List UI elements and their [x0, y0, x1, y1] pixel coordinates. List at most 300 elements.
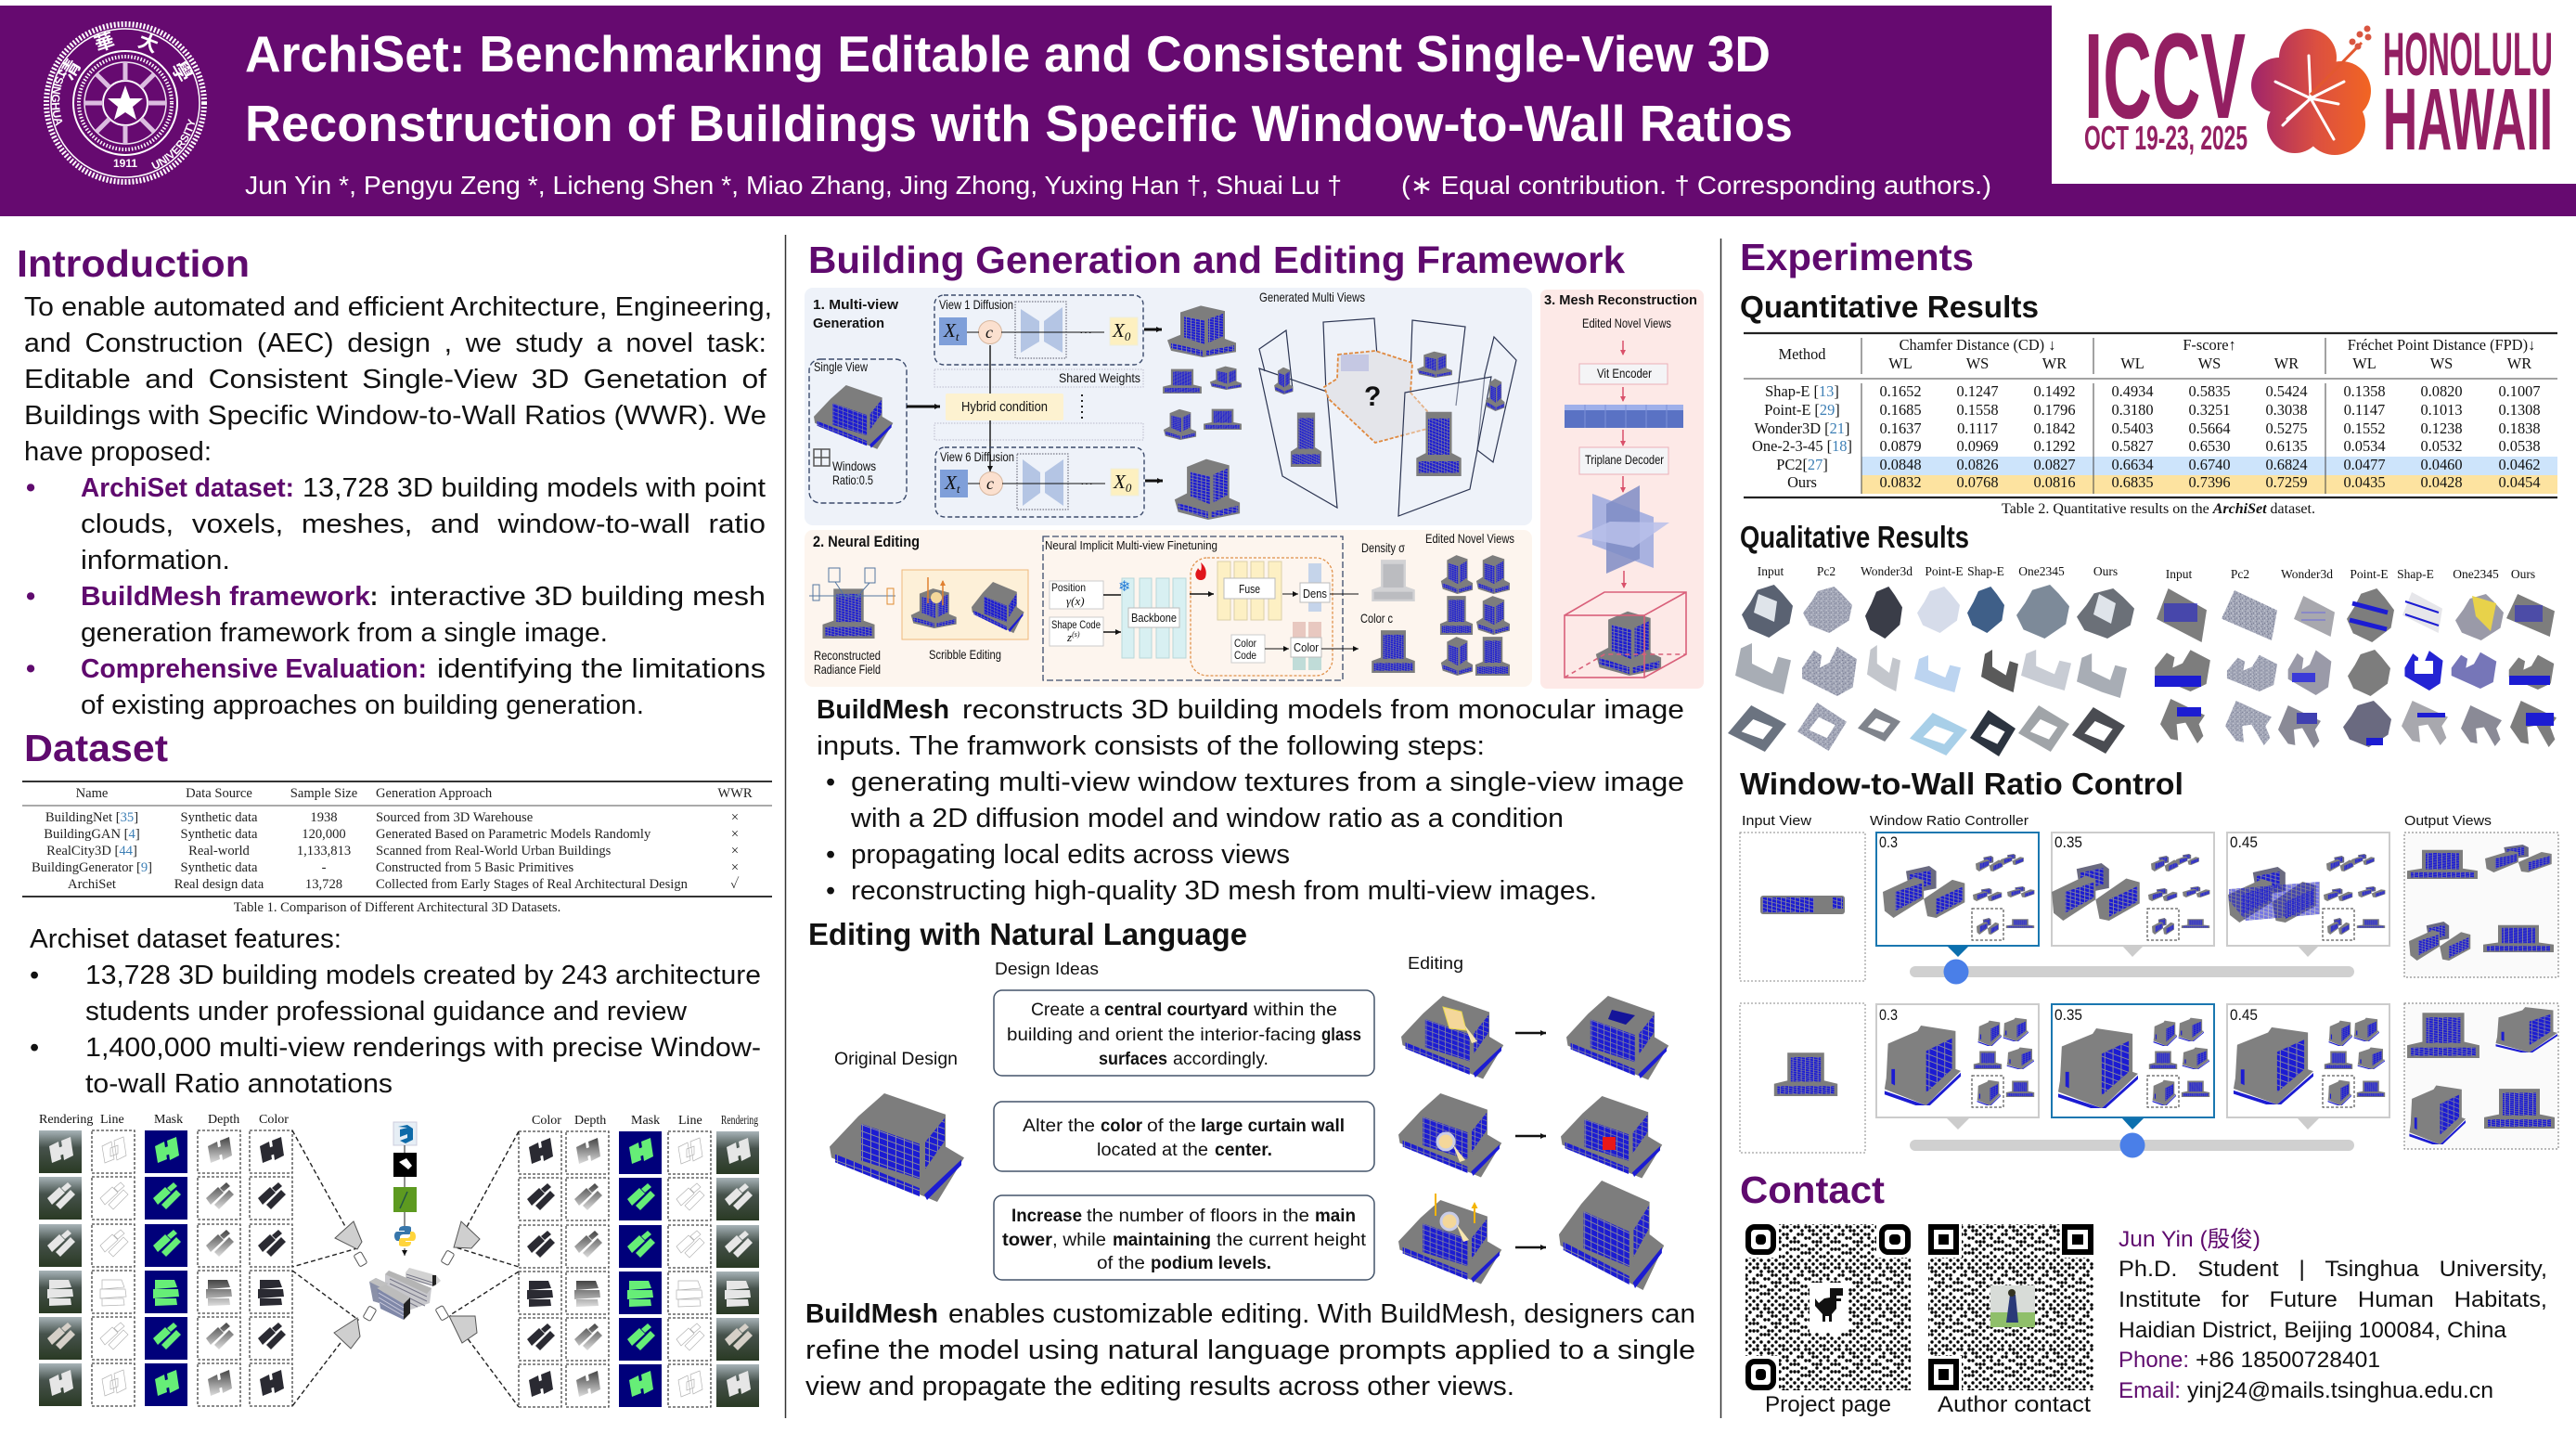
- table 2: quantitative results: 0.6824: [2265, 456, 2308, 473]
- table 1: dataset comparison: Sample Size: [290, 786, 357, 801]
- table 2: quantitative results: F-score↑: [2183, 336, 2236, 354]
- neural implicit finetuning: Shape Code: [1051, 618, 1101, 631]
- method labels: Shap-E: [1967, 564, 2004, 578]
- table 2: quantitative results: Fréchet Point Distance (FPD)↓: [2348, 336, 2535, 354]
- table 1: dataset comparison: 120,000: [302, 827, 346, 842]
- panel: neural editing: 2. Neural Editing: [813, 533, 920, 550]
- design idea 2: Alter the: [1023, 1117, 1095, 1136]
- radiance field: Reconstructed: [814, 648, 881, 663]
- design idea 3: main: [1315, 1207, 1356, 1226]
- heading: Dataset: Dataset: [24, 727, 168, 769]
- table 1: dataset comparison: Real design data: [174, 877, 264, 892]
- panel: introduction text: Editable and Consistent Single-View 3D Genetation of: [24, 365, 767, 394]
- panel: introduction text: •: [26, 654, 35, 684]
- paragraph: BuildMesh editing: refine the model using natural language prompts applied to a single: [805, 1336, 1695, 1365]
- table 2: quantitative results: 0.1637: [1879, 420, 1922, 437]
- column labels: right: Mask: [631, 1114, 660, 1128]
- window ratio control figure: Output Views: [2404, 813, 2492, 829]
- column labels: right: Line: [678, 1114, 702, 1128]
- design idea 1: building and orient the interior-facing: [1007, 1026, 1316, 1045]
- table 2: quantitative results: 0.0532: [2420, 437, 2463, 455]
- row 1: ratio panels: [1876, 833, 2389, 984]
- input views: [1740, 833, 1865, 1153]
- table 2: quantitative results: 0.5424: [2265, 382, 2308, 400]
- panel: introduction text: •: [26, 473, 35, 503]
- authors: [245, 171, 1991, 200]
- view 1 diffusion: c: [985, 323, 993, 342]
- table 1: dataset comparison: Data Source: [186, 786, 252, 801]
- dataset features text: [30, 924, 761, 1099]
- table 1: dataset comparison: BuildingGAN [4]: [44, 827, 140, 842]
- table 1: dataset comparison: BuildingGenerator [9]: [32, 860, 152, 875]
- method labels: Wonder3d: [2281, 567, 2333, 581]
- table 2: quantitative results: 0.0820: [2420, 382, 2463, 400]
- icon: Tsinghua University seal: 清華大學: [59, 32, 193, 82]
- table 2: quantitative results: 0.1013: [2420, 401, 2463, 419]
- view 1 diffusion: X: [1113, 319, 1125, 342]
- natural language editing figure: Original Design: [834, 1050, 958, 1069]
- radiance field: Radiance Field: [814, 662, 881, 677]
- contact details: Institute for Future Human Habitats,: [2119, 1287, 2547, 1312]
- heading: Contact: Contact: [1740, 1168, 1885, 1211]
- table 1: dataset comparison: Synthetic data: [180, 860, 258, 875]
- table 2: quantitative results: 0.7259: [2265, 473, 2308, 491]
- table 2: quantitative results: 0.1007: [2498, 382, 2541, 400]
- design idea 1: Create a: [1031, 1001, 1100, 1020]
- panel: introduction text: of existing approaches on building generation.: [81, 691, 644, 720]
- neural implicit finetuning: Color: [1234, 637, 1256, 650]
- table 1: dataset comparison: ×: [731, 810, 739, 825]
- view 6 diffusion: 0: [1126, 481, 1132, 495]
- table 2: quantitative results: 0.1838: [2498, 420, 2541, 437]
- heading: Introduction: Introduction: [17, 242, 250, 285]
- table 2: quantitative results: 0.1117: [1957, 420, 1998, 437]
- view 1 diffusion: X: [944, 319, 956, 342]
- design idea 3: Increase: [1011, 1207, 1082, 1226]
- generated multi views: [1259, 290, 1516, 516]
- icon: Tsinghua University seal: TSINGHUA: [52, 72, 67, 126]
- ICCV logo: OCT 19-23, 2025: [2084, 119, 2248, 157]
- hybrid condition: [946, 345, 1063, 471]
- panel: introduction text: •: [26, 582, 35, 612]
- neural implicit finetuning: Position: [1051, 581, 1086, 594]
- scribble editing: Scribble Editing: [929, 647, 1001, 662]
- dataset features text: 1,400,000 multi-view renderings with precise Window-: [85, 1033, 761, 1063]
- dataset features text: Archiset dataset features:: [30, 924, 341, 954]
- table 2: quantitative results: 0.1358: [2343, 382, 2386, 400]
- panel: introduction text: :: [370, 582, 378, 612]
- method labels: Ours: [2511, 567, 2535, 581]
- table 2: quantitative results: 0.5835: [2188, 382, 2231, 400]
- generated multi views: ?: [1364, 381, 1381, 412]
- icon: Tsinghua University seal: 1911: [113, 157, 137, 170]
- paragraph: BuildMesh reconstruction: •: [826, 876, 835, 906]
- ICCV logo: ICCV: [2084, 7, 2246, 144]
- table 2: quantitative results: 0.5403: [2111, 420, 2154, 437]
- design idea 2: color: [1101, 1117, 1143, 1136]
- table 2: quantitative results: 0.0969: [1956, 437, 1999, 455]
- paragraph: BuildMesh reconstruction: propagating local edits across views: [851, 840, 1290, 870]
- paragraph: BuildMesh editing: view and propagate the editing results across other views.: [805, 1372, 1514, 1401]
- neural implicit finetuning: (s): [1072, 630, 1080, 639]
- neural implicit finetuning: ❄: [1118, 579, 1130, 595]
- table 2: quantitative results: Table 2. Quantitative results on the ArchiSet dataset.: [2002, 501, 2315, 517]
- panel: multi-view generation: Generation: [813, 316, 884, 331]
- authors: (∗ Equal contribution. † Corresponding authors.): [1401, 171, 1991, 200]
- panel: introduction text: information.: [81, 546, 230, 575]
- view 6 diffusion: c: [986, 474, 994, 493]
- paragraph: BuildMesh editing: BuildMesh: [805, 1299, 938, 1329]
- table 1: dataset comparison: Real-world: [188, 844, 251, 859]
- slider: [1910, 966, 2354, 977]
- design idea 1: [994, 990, 1374, 1076]
- table 2: quantitative results: Shap-E [13]: [1765, 382, 1839, 400]
- table 2: quantitative results: WR: [2507, 355, 2531, 372]
- design idea 1: accordingly.: [1173, 1050, 1269, 1069]
- contact details: Jun Yin (殷俊): [2119, 1227, 2260, 1252]
- design idea 3: the number of floors in the: [1087, 1207, 1309, 1226]
- neural implicit finetuning: z: [1067, 630, 1072, 644]
- single view input: [809, 359, 907, 503]
- shared weights: [934, 369, 1143, 440]
- view 1 diffusion: [934, 295, 1236, 365]
- contact details: yinj24@mails.tsinghua.edu.cn: [2187, 1378, 2493, 1403]
- row 2: ratio panels: 0.3: [1879, 1006, 1898, 1024]
- table 2: quantitative results: 0.5664: [2188, 420, 2231, 437]
- panel: introduction text: 13,728 3D building models with point: [303, 473, 766, 503]
- table 2: quantitative results: 0.6835: [2111, 473, 2154, 491]
- panel: neural editing: [805, 530, 1532, 687]
- design idea 1: surfaces: [1099, 1050, 1167, 1069]
- table 2: quantitative results: WR: [2042, 355, 2067, 372]
- panel: introduction text: Comprehensive Evaluation:: [81, 654, 427, 684]
- table 2: quantitative results: 0.6135: [2265, 437, 2308, 455]
- heading: framework: Building Generation and Editing Framework: [808, 239, 1625, 281]
- table 2: quantitative results: 0.0816: [2033, 473, 2076, 491]
- row 2: ratio panels: 0.35: [2054, 1006, 2082, 1024]
- table 2: quantitative results: [1744, 333, 2557, 517]
- table 2: quantitative results: 0.3038: [2265, 401, 2308, 419]
- design idea 3: of the: [1097, 1254, 1145, 1273]
- table 2: quantitative results: 0.4934: [2111, 382, 2154, 400]
- method labels: One2345: [2453, 567, 2499, 581]
- outputs: Color c: [1360, 611, 1393, 626]
- generated multi views: Generated Multi Views: [1259, 290, 1365, 304]
- design idea 3: maintaining: [1113, 1231, 1211, 1250]
- design idea 3: [994, 1195, 1374, 1280]
- table 1: dataset comparison: RealCity3D [44]: [46, 844, 137, 859]
- table 2: quantitative results: 0.1558: [1956, 401, 1999, 419]
- icon: Tsinghua University seal: [44, 21, 207, 185]
- column labels: right: Depth: [574, 1114, 606, 1128]
- hybrid condition: Hybrid condition: [961, 399, 1048, 415]
- table 2: quantitative results: 0.1247: [1956, 382, 1999, 400]
- heading: Window-to-Wall Ratio Control: Window-to-Wall Ratio Control: [1740, 767, 2183, 801]
- icon: dinosaur: [1815, 1288, 1843, 1322]
- natural language editing figure: [830, 954, 1668, 1290]
- table 2: quantitative results: 0.1842: [2033, 420, 2076, 437]
- output mesh cube: [1565, 592, 1686, 678]
- row 1: ratio panels: 0.35: [2054, 833, 2082, 851]
- table 2: quantitative results: 0.1652: [1879, 382, 1922, 400]
- paragraph: BuildMesh reconstruction: [817, 695, 1684, 906]
- design idea 2: of the: [1147, 1117, 1196, 1136]
- natural language editing figure: Editing: [1408, 954, 1463, 973]
- paragraph: BuildMesh reconstruction: reconstructing high-quality 3D mesh from multi-view images.: [851, 876, 1597, 906]
- panel: multi-view generation: [805, 288, 1532, 525]
- table 2: quantitative results: 0.0538: [2498, 437, 2541, 455]
- paragraph: BuildMesh reconstruction: generating multi-view window textures from a single-view image: [851, 768, 1684, 797]
- header banner: [0, 6, 2576, 216]
- neural implicit finetuning: Dens: [1303, 587, 1327, 600]
- icon: Tsinghua University seal: UNIVERSITY: [151, 119, 195, 169]
- neural implicit finetuning: Color: [1294, 640, 1320, 654]
- column labels: left: Rendering: [39, 1113, 93, 1127]
- table 1: dataset comparison: 13,728: [305, 877, 342, 892]
- blue-window results: [2155, 588, 2557, 748]
- contact details: Phone:: [2119, 1348, 2189, 1373]
- contact details: Email:: [2119, 1378, 2181, 1403]
- method labels: Ours: [2093, 564, 2118, 578]
- paragraph: BuildMesh reconstruction: reconstructs 3D building models from monocular image: [962, 695, 1684, 725]
- neural implicit finetuning: Fuse: [1239, 582, 1260, 596]
- table 2: quantitative results: Ours: [1787, 473, 1817, 491]
- table 1: dataset comparison: Scanned from Real-World Urban Buildings: [376, 844, 612, 859]
- table 2: quantitative results: 0.0832: [1879, 473, 1922, 491]
- table 2: quantitative results: WR: [2274, 355, 2299, 372]
- table 1: dataset comparison: Synthetic data: [180, 827, 258, 842]
- table 2: quantitative results: Wonder3D [21]: [1755, 420, 1849, 437]
- heading: Quantitative Results: Quantitative Results: [1740, 290, 2039, 324]
- table 2: quantitative results: 0.1685: [1879, 401, 1922, 419]
- table 2: quantitative results: 0.0477: [2343, 456, 2386, 473]
- design idea 3: the current height: [1217, 1231, 1367, 1250]
- QR code: author contact: Author contact: [1938, 1392, 2091, 1417]
- panel: introduction text: identifying the limitations: [437, 654, 766, 684]
- table 2: quantitative results: 0.1238: [2420, 420, 2463, 437]
- slider: [1910, 1140, 2354, 1151]
- dataset features text: •: [30, 961, 39, 990]
- neural implicit finetuning: γ(x): [1066, 594, 1085, 608]
- outputs: Edited Novel Views: [1425, 531, 1514, 546]
- photo-textured results: [1728, 585, 2134, 756]
- editing examples: [1398, 996, 1668, 1290]
- table 2: quantitative results: 0.0460: [2420, 456, 2463, 473]
- neural implicit finetuning: Neural Implicit Multi-view Finetuning: [1045, 538, 1217, 552]
- method labels: One2345: [2018, 564, 2065, 578]
- table 2: quantitative results: 0.6740: [2188, 456, 2231, 473]
- contact details: Haidian District, Beijing 100084, China: [2119, 1318, 2507, 1343]
- single view input: Ratio:0.5: [832, 472, 873, 487]
- paragraph: BuildMesh reconstruction: BuildMesh: [817, 695, 949, 725]
- method labels: Input: [2166, 567, 2192, 581]
- single view input: Windows: [832, 458, 876, 473]
- panel: multi-view generation: 1. Multi-view: [813, 297, 898, 313]
- table 2: quantitative results: 0.0462: [2498, 456, 2541, 473]
- panel: introduction text: Buildings with Specific Window-to-Wall Ratios (WWR). We: [24, 401, 766, 431]
- table 1: dataset comparison: -: [322, 860, 327, 875]
- table 1: dataset comparison: Name: [76, 786, 108, 801]
- panel: mesh reconstruction: Triplane Decoder: [1585, 452, 1664, 467]
- framework figure: [805, 288, 1704, 689]
- view 1 diffusion: ···: [1079, 324, 1092, 339]
- ICCV logo: [2052, 0, 2576, 184]
- table 2: quantitative results: One-2-3-45 [18]: [1752, 437, 1852, 455]
- shared weights: Shared Weights: [1059, 370, 1140, 385]
- heading: editing with natural language: Editing with Natural Language: [808, 917, 1247, 951]
- table 2: quantitative results: WS: [2198, 355, 2221, 372]
- QR code: project page: Project page: [1765, 1392, 1891, 1417]
- table 2: quantitative results: PC2[27]: [1776, 456, 1828, 473]
- neural implicit finetuning: Backbone: [1131, 611, 1177, 625]
- table 1: dataset comparison: Generation Approach: [376, 786, 493, 801]
- design idea 2: [994, 1102, 1374, 1171]
- title: ArchiSet: Benchmarking Editable and Consistent Single-View 3D: [245, 25, 1771, 83]
- table 1: dataset comparison: WWR: [717, 786, 753, 801]
- window ratio control figure: Window Ratio Controller: [1870, 813, 2029, 829]
- method labels: Point-E: [2350, 567, 2389, 581]
- neural implicit finetuning: Code: [1234, 649, 1256, 662]
- scribble editing: [902, 570, 1028, 662]
- design idea 2: center.: [1215, 1141, 1272, 1160]
- design idea 2: large curtain wall: [1201, 1117, 1345, 1136]
- panel: introduction text: To enable automated and efficient Architecture, Engineering,: [24, 292, 772, 322]
- table 2: quantitative results: 0.6530: [2188, 437, 2231, 455]
- method labels: Input: [1758, 564, 1784, 578]
- method labels: Point-E: [1925, 564, 1964, 578]
- column labels: left: [39, 1113, 289, 1127]
- table 2: quantitative results: 0.0848: [1879, 456, 1922, 473]
- window ratio control figure: Input View: [1742, 813, 1811, 829]
- column dividers: [785, 235, 1720, 1418]
- table 2: quantitative results: WL: [1888, 355, 1913, 372]
- row 2: ratio panels: [1876, 1004, 2389, 1158]
- icon: cameras: [334, 1221, 480, 1349]
- panel: mesh reconstruction: Vit Encoder: [1597, 366, 1652, 381]
- authors: Jun Yin *, Pengyu Zeng *, Licheng Shen *, Miao Zhang, Jing Zhong, Yuxing Han †, Shuai Lu †: [245, 171, 1342, 200]
- table 2: quantitative results: 0.5827: [2111, 437, 2154, 455]
- original design building: [830, 1093, 964, 1202]
- panel: introduction text: ArchiSet dataset:: [81, 473, 294, 503]
- table 2: quantitative results: 0.1796: [2033, 401, 2076, 419]
- triplane: [1577, 485, 1669, 574]
- natural language editing figure: Design Ideas: [995, 960, 1099, 978]
- title: [245, 25, 1793, 152]
- table 2: quantitative results: 0.0534: [2343, 437, 2386, 455]
- table 2: quantitative results: 0.1147: [2344, 401, 2385, 419]
- dataset features text: to-wall Ratio annotations: [85, 1069, 393, 1099]
- table 2: quantitative results: 0.0435: [2343, 473, 2386, 491]
- panel: introduction text: BuildMesh framework: [81, 582, 371, 612]
- paragraph: BuildMesh reconstruction: with a 2D diffusion model and window ratio as a condition: [850, 804, 1564, 833]
- paragraph: BuildMesh reconstruction: •: [826, 768, 835, 797]
- table 2: quantitative results: 0.1308: [2498, 401, 2541, 419]
- table 2: quantitative results: 0.0768: [1956, 473, 1999, 491]
- column labels: left: Mask: [154, 1113, 183, 1127]
- table 1: dataset comparison: Collected from Early Stages of Real Architectural Design: [376, 877, 689, 892]
- contact details: +86 18500728401: [2196, 1348, 2380, 1373]
- qualitative results figure: [1728, 564, 2557, 756]
- method labels: Pc2: [2231, 567, 2249, 581]
- table 1: dataset comparison: ArchiSet: [68, 877, 116, 892]
- table 2: quantitative results: 0.0827: [2033, 456, 2076, 473]
- table 1: dataset comparison: Generated Based on Parametric Models Randomly: [376, 827, 651, 842]
- single view input: Single View: [814, 359, 869, 374]
- outputs: Density σ: [1361, 540, 1405, 555]
- column labels: left: Depth: [208, 1113, 239, 1127]
- row 2: ratio panels: 0.45: [2230, 1006, 2258, 1024]
- table 2: quantitative results: 0.1552: [2343, 420, 2386, 437]
- heading: Qualitative Results: Qualitative Results: [1740, 520, 1969, 554]
- table 1: dataset comparison: ✓: [730, 876, 740, 892]
- design idea 1: within the: [1253, 1001, 1337, 1020]
- output views: [2404, 833, 2558, 1149]
- design idea 2: located at the: [1097, 1141, 1208, 1160]
- table 2: quantitative results: Point-E [29]: [1764, 401, 1840, 419]
- panel: introduction text: have proposed:: [24, 437, 212, 467]
- paragraph: BuildMesh reconstruction: inputs. The framwork consists of the following steps:: [817, 731, 1485, 761]
- view 6 diffusion: View 6 Diffusion: [940, 449, 1014, 464]
- dataset features text: 13,728 3D building models created by 243 architecture: [85, 961, 761, 990]
- panel: introduction text: [24, 292, 772, 720]
- window ratio control figure: [1740, 813, 2558, 1158]
- panel: mesh reconstruction: [1540, 290, 1704, 689]
- title: Reconstruction of Buildings with Specific Window-to-Wall Ratios: [245, 95, 1793, 152]
- view 6 diffusion: [935, 447, 1240, 520]
- table 2: quantitative results: WS: [1966, 355, 1989, 372]
- table 1: dataset comparison: 1,133,813: [297, 844, 351, 859]
- table 1: dataset comparison: Constructed from 5 Basic Primitives: [376, 860, 574, 875]
- panel: introduction text: generation framework from a single image.: [81, 618, 608, 648]
- right image columns: [519, 1131, 759, 1407]
- method labels: [1758, 564, 2535, 581]
- table 2: quantitative results: WS: [2430, 355, 2453, 372]
- camera view lines: [292, 1130, 519, 1407]
- table 2: quantitative results: 0.0826: [1956, 456, 1999, 473]
- panel: introduction text: interactive 3D building mesh: [390, 582, 766, 612]
- table 1: dataset comparison: Table 1. Comparison of Different Architectural 3D Datasets.: [234, 900, 560, 915]
- table 1: dataset comparison: Sourced from 3D Warehouse: [376, 810, 533, 825]
- outputs: [1360, 531, 1514, 676]
- method labels: Shap-E: [2397, 567, 2434, 581]
- table 2: quantitative results: WL: [2352, 355, 2376, 372]
- view 6 diffusion: t: [957, 482, 960, 496]
- table 2: quantitative results: 0.0454: [2498, 473, 2541, 491]
- table 1: dataset comparison: ×: [731, 844, 739, 859]
- table 1: dataset comparison: [22, 781, 772, 915]
- radiance field: [809, 568, 895, 677]
- table 2: quantitative results: 0.1292: [2033, 437, 2076, 455]
- table 2: quantitative results: 0.0879: [1879, 437, 1922, 455]
- panel: introduction text: clouds, voxels, meshes, and window-to-wall ratio: [81, 510, 766, 539]
- method labels: Wonder3d: [1861, 564, 1913, 578]
- view 6 diffusion: X: [1114, 471, 1126, 493]
- method labels: Pc2: [1817, 564, 1835, 578]
- column labels: left: Line: [100, 1113, 124, 1127]
- contact details: [2119, 1227, 2547, 1403]
- table 1: dataset comparison: 1938: [310, 810, 338, 825]
- table 2: quantitative results: 0.5275: [2265, 420, 2308, 437]
- table 2: quantitative results: 0.0428: [2420, 473, 2463, 491]
- table 2: quantitative results: 0.3180: [2111, 401, 2154, 419]
- panel: mesh reconstruction: 3. Mesh Reconstruction: [1544, 292, 1697, 308]
- table 2: quantitative results: 0.7396: [2188, 473, 2231, 491]
- dataset features text: •: [30, 1033, 39, 1063]
- table 2: quantitative results: 0.3251: [2188, 401, 2231, 419]
- row 1: ratio panels: 0.3: [1879, 833, 1898, 851]
- view 1 diffusion: View 1 Diffusion: [939, 297, 1013, 312]
- view 1 diffusion: t: [956, 329, 960, 343]
